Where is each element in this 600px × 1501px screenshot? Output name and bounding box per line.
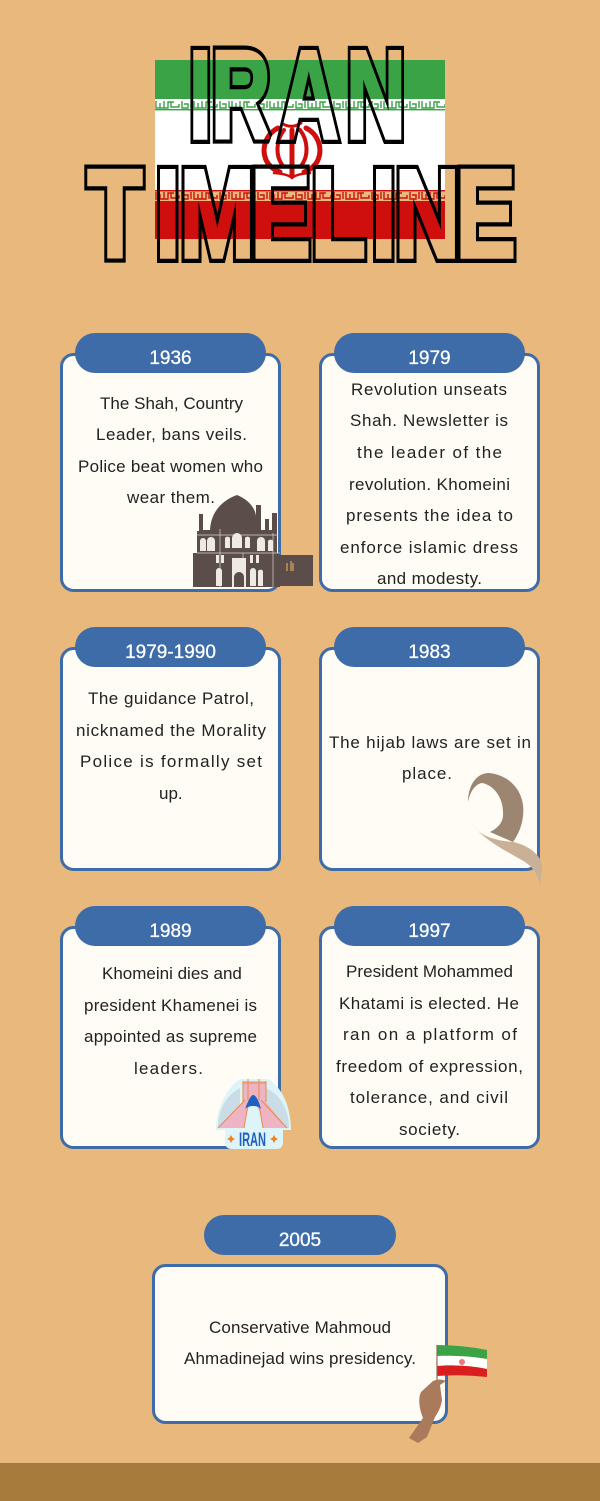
year pill: 1997 — [334, 906, 525, 946]
text: 1997: ran on a platform of — [343, 1025, 517, 1044]
bottom band — [0, 1463, 600, 1501]
text: 1997 — [336, 962, 523, 1139]
text: 2005: Conservative Mahmoud — [209, 1318, 391, 1337]
text: 1989: appointed as supreme — [84, 1027, 257, 1046]
text: 1983: The hijab laws are set in — [329, 733, 531, 752]
year pill: 1979-1990: 1979-1990 — [125, 642, 216, 663]
text: 1979-1990: The guidance Patrol, — [88, 689, 254, 708]
text: 2005: Ahmadinejad wins presidency. — [184, 1349, 416, 1368]
year pill: 1979 — [334, 333, 525, 373]
year pill: 1983 — [334, 627, 525, 667]
iran flag — [155, 60, 445, 239]
text: 1997: President Mohammed — [346, 962, 513, 981]
text: 1983: place. — [402, 764, 452, 783]
panel: 1989 — [62, 906, 291, 1151]
year pill: 1936: 1936 — [149, 348, 192, 369]
text: 1983 — [329, 733, 531, 783]
text: 2005 — [184, 1318, 416, 1368]
text: 1936: Leader, bans veils. — [96, 425, 247, 444]
icon: domed mausoleum — [193, 495, 313, 587]
year pill: 1997: 1997 — [408, 921, 451, 942]
flag emblem — [264, 123, 320, 178]
panel: 1979 — [320, 333, 538, 590]
panel: 2005 — [154, 1215, 487, 1443]
text: 1979: Shah. Newsletter is — [350, 411, 508, 430]
panel: 1936 — [62, 333, 313, 590]
text: 1936: wear them. — [126, 488, 215, 507]
text: 1989 — [84, 964, 257, 1078]
text: 1979-1990 — [76, 689, 266, 803]
text: 1979 — [340, 380, 518, 588]
text: 1936: Police beat women who — [78, 457, 263, 476]
title: IRAN — [189, 26, 406, 165]
year pill: 1989: 1989 — [149, 921, 192, 942]
panel: 1979-1990 — [62, 627, 280, 870]
text: 1997: freedom of expression, — [336, 1057, 523, 1076]
text: 1989: president Khamenei is — [84, 996, 257, 1015]
icon: hand holding iran flag — [409, 1345, 487, 1443]
panel: 1983 — [320, 627, 542, 885]
text: 1989: Khomeini dies and — [102, 964, 242, 983]
text: 1989: leaders. — [134, 1059, 203, 1078]
text: 1979: the leader of the — [357, 443, 502, 462]
year pill: 2005 — [204, 1215, 396, 1255]
text: 1997: Khatami is elected. He — [339, 994, 519, 1013]
year pill: 2005: 2005 — [279, 1230, 321, 1251]
text: 1979: revolution. Khomeini — [349, 475, 510, 494]
panel: 1997 — [320, 906, 538, 1148]
year pill: 1979: 1979 — [408, 348, 451, 369]
year pill: 1979-1990 — [75, 627, 266, 667]
text: 1979: Revolution unseats — [351, 380, 507, 399]
text: 1997: tolerance, and civil — [350, 1088, 508, 1107]
text: 1979-1990: nicknamed the Morality — [76, 721, 266, 740]
text: 1979: enforce islamic dress — [340, 538, 518, 557]
icon: hijab scarf — [468, 773, 542, 885]
year pill: 1936 — [75, 333, 266, 373]
text: 1979-1990: up. — [159, 784, 183, 803]
text: 1936 — [78, 394, 263, 507]
text: 1936: The Shah, Country — [100, 394, 244, 413]
year pill: 1989 — [75, 906, 266, 946]
icon: azadi tower sticker: IRAN — [239, 1130, 266, 1151]
text: 1979: and modesty. — [377, 569, 482, 588]
text: 1997: society. — [399, 1120, 460, 1139]
year pill: 1983: 1983 — [408, 642, 451, 663]
icon: azadi tower sticker — [216, 1079, 291, 1151]
title: TIMELINE — [87, 145, 516, 285]
title — [84, 46, 516, 263]
text: 1979: presents the idea to — [346, 506, 513, 525]
text: 1979-1990: Police is formally set — [80, 752, 262, 771]
